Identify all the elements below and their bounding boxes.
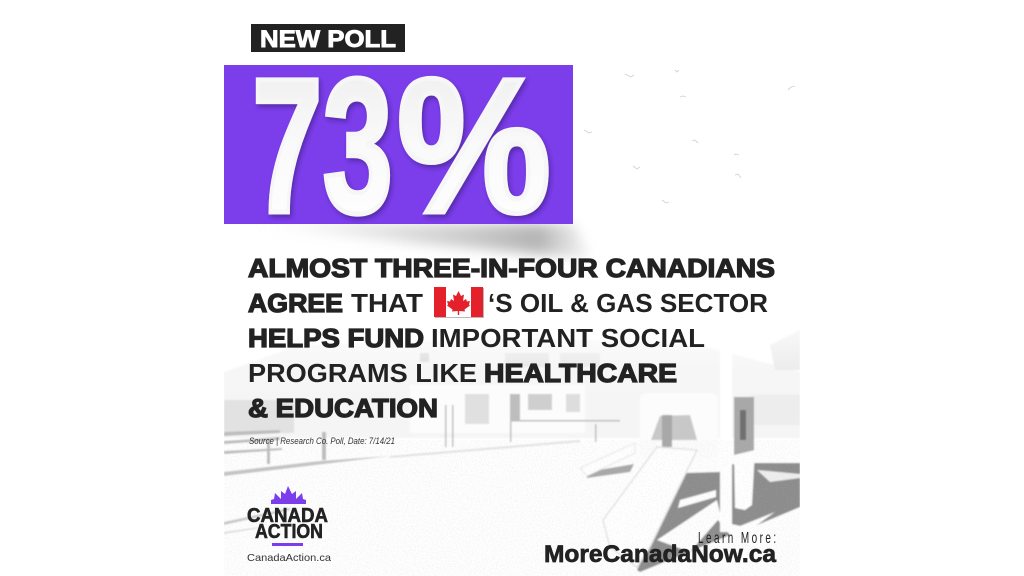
logo: canada action: CANADA — [247, 505, 328, 527]
logo: canada action — [247, 486, 331, 564]
panel: playground photo background — [224, 336, 800, 576]
text block: main statement: HELPS FUND — [248, 323, 424, 353]
ground grain — [224, 440, 800, 576]
text block: main statement: HEALTHCARE — [484, 358, 677, 388]
building roof and walls — [224, 330, 800, 440]
text block: main statement: IMPORTANT SOCIAL — [431, 323, 705, 353]
logo: canada action: ACTION — [255, 521, 323, 543]
text block: main statement: ALMOST THREE-IN-FOUR CANADIANS — [248, 253, 775, 283]
dark shadows on ground — [637, 463, 800, 572]
source note: Source | Research Co. Poll, Date: 7/14/21 — [249, 436, 395, 447]
call to action: website: MoreCanadaNow.ca — [544, 541, 777, 568]
text block: main statement: & EDUCATION — [248, 393, 438, 423]
play structure and slide — [580, 350, 755, 567]
icon: canadian flag — [434, 287, 484, 318]
birds — [584, 70, 795, 203]
big number: 73 — [252, 38, 393, 253]
text block: main statement: PROGRAMS LIKE — [248, 358, 477, 388]
panel: purple statistic banner — [224, 38, 590, 258]
banner shadow — [250, 224, 590, 258]
call to action: website — [544, 529, 777, 568]
text block: main statement: AGREE — [248, 288, 343, 318]
heading: new poll badge: NEW POLL — [260, 26, 396, 53]
text block: main statement: ‘S OIL & GAS SECTOR — [488, 288, 768, 318]
text block: main statement — [248, 253, 775, 423]
ground — [638, 463, 800, 572]
big number: % — [397, 38, 551, 253]
icon: maple leaf — [271, 486, 306, 504]
benches and posts — [224, 405, 596, 534]
call to action: website: Learn More: — [698, 529, 776, 547]
logo: canada action: CanadaAction.ca — [247, 552, 331, 564]
fade to sky — [422, 331, 800, 355]
text block: main statement: THAT — [351, 288, 423, 318]
